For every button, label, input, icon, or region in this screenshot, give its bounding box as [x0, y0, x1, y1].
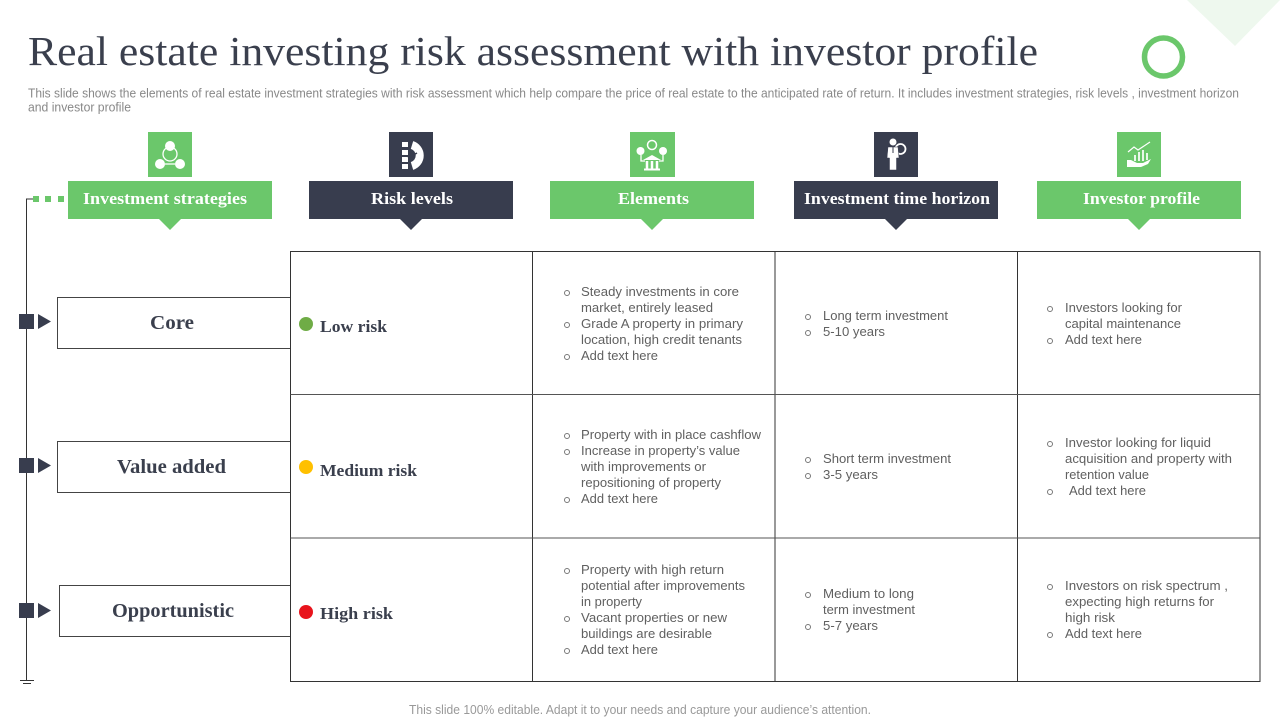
timeline connector [20, 196, 64, 684]
column header: Elements: Elements [618, 189, 689, 208]
column header: Investment strategies: Investment strategies [83, 189, 247, 208]
investor profile: value added: Investor looking for liquid [1065, 435, 1211, 450]
icon: risk gauge [389, 132, 433, 177]
investor profile: core: capital maintenance [1065, 316, 1181, 331]
column header: Investor profile: Investor profile [1083, 189, 1200, 208]
row: Opportunistic: Opportunistic [112, 600, 234, 622]
icon: hand with growth chart [1117, 132, 1161, 177]
elements: core: Grade A property in primary [581, 316, 743, 331]
row: Core [19, 298, 290, 348]
elements: core: location, high credit tenants [581, 332, 742, 347]
column header: Investment strategies [68, 132, 272, 230]
row: Value added [19, 442, 290, 492]
row: Core: Core [150, 312, 194, 334]
title: Real estate investing risk assessment with investor profile [28, 28, 1038, 74]
elements: value added: repositioning of property [581, 475, 721, 490]
investor profile: core: Investors looking for [1065, 300, 1183, 315]
time horizon: opportunistic: 5-7 years [823, 618, 878, 633]
icon: businessman with clock [874, 132, 918, 177]
investor profile: value added: acquisition and property with [1065, 451, 1232, 466]
risk level: low: Low risk [320, 317, 388, 336]
elements: opportunistic: Property with high return [581, 562, 724, 577]
elements: value added [564, 427, 762, 506]
description: and investor profile [28, 100, 131, 114]
elements: core: market, entirely leased [581, 300, 713, 315]
investor profile: value added: retention value [1065, 467, 1149, 482]
column header: Elements [550, 132, 754, 230]
description: This slide shows the elements of real estate investment strategies with risk assessment which help compare the price of real estate to the anticipated rate of return. It includes investment strategies, risk levels , investment horizon [28, 86, 1239, 100]
time horizon: value added [806, 451, 951, 482]
investor profile: value added: Add text here [1069, 483, 1146, 498]
description [28, 86, 1239, 114]
icon: strategy circles [148, 132, 192, 177]
decorative green ring [1144, 38, 1182, 76]
investor profile: opportunistic: high risk [1065, 610, 1116, 625]
elements: opportunistic: in property [581, 594, 642, 609]
row: Opportunistic [19, 586, 290, 636]
table grid [290, 252, 1260, 682]
elements: opportunistic [564, 562, 745, 657]
column header: Investor profile [1037, 132, 1241, 230]
investor profile: core [1048, 300, 1183, 347]
elements: core: Steady investments in core [581, 284, 739, 299]
time horizon: core: 5-10 years [823, 324, 886, 339]
row: Value added: Value added [117, 456, 226, 478]
time horizon: opportunistic [806, 586, 915, 633]
elements: core [564, 284, 743, 363]
decorative corner triangle [1187, 0, 1280, 46]
elements: opportunistic: buildings are desirable [581, 626, 712, 641]
investor profile: opportunistic: Add text here [1065, 626, 1142, 641]
elements: value added: with improvements or [580, 459, 707, 474]
time horizon: opportunistic: Medium to long [823, 586, 914, 601]
column header: Investment time horizon [794, 132, 998, 230]
risk level: medium: Medium risk [320, 461, 418, 480]
elements: value added: Increase in property’s value [581, 443, 740, 458]
elements: opportunistic: potential after improvements [581, 578, 745, 593]
investor profile: opportunistic [1048, 578, 1228, 641]
investor profile: value added [1048, 435, 1232, 498]
risk level: high: High risk [320, 604, 394, 623]
time horizon: value added: 3-5 years [823, 467, 878, 482]
footer note: This slide 100% editable. Adapt it to your needs and capture your audience’s attention. [409, 703, 871, 717]
elements: core: Add text here [581, 348, 658, 363]
time horizon: core: Long term investment [823, 308, 948, 323]
icon: property with elements [630, 132, 675, 177]
elements: opportunistic: Vacant properties or new [581, 610, 728, 625]
column header: Risk levels [309, 132, 513, 230]
column header: Risk levels: Risk levels [371, 189, 453, 208]
time horizon: opportunistic: term investment [823, 602, 915, 617]
time horizon: value added: Short term investment [823, 451, 951, 466]
elements: value added: Add text here [581, 491, 658, 506]
elements: value added: Property with in place cashflow [581, 427, 762, 442]
investor profile: opportunistic: expecting high returns for [1065, 594, 1215, 609]
time horizon: core [806, 308, 948, 339]
investor profile: opportunistic: Investors on risk spectrum , [1065, 578, 1228, 593]
elements: opportunistic: Add text here [581, 642, 658, 657]
investor profile: core: Add text here [1065, 332, 1142, 347]
column header: Investment time horizon: Investment time horizon [804, 189, 991, 208]
